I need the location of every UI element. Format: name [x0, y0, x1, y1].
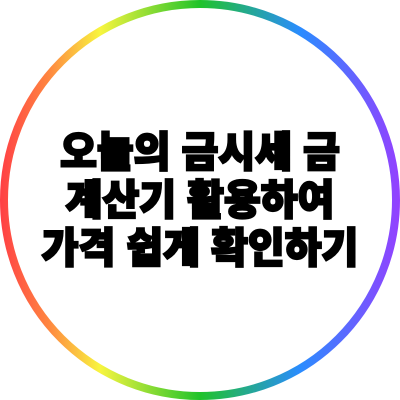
- title line 3: 가격 쉽게 확인하기: [42, 226, 358, 272]
- title line 2: 계산기 활용하여: [66, 178, 334, 224]
- title line 1: 오늘의 금시세 금: [60, 130, 340, 176]
- title: [40, 130, 358, 272]
